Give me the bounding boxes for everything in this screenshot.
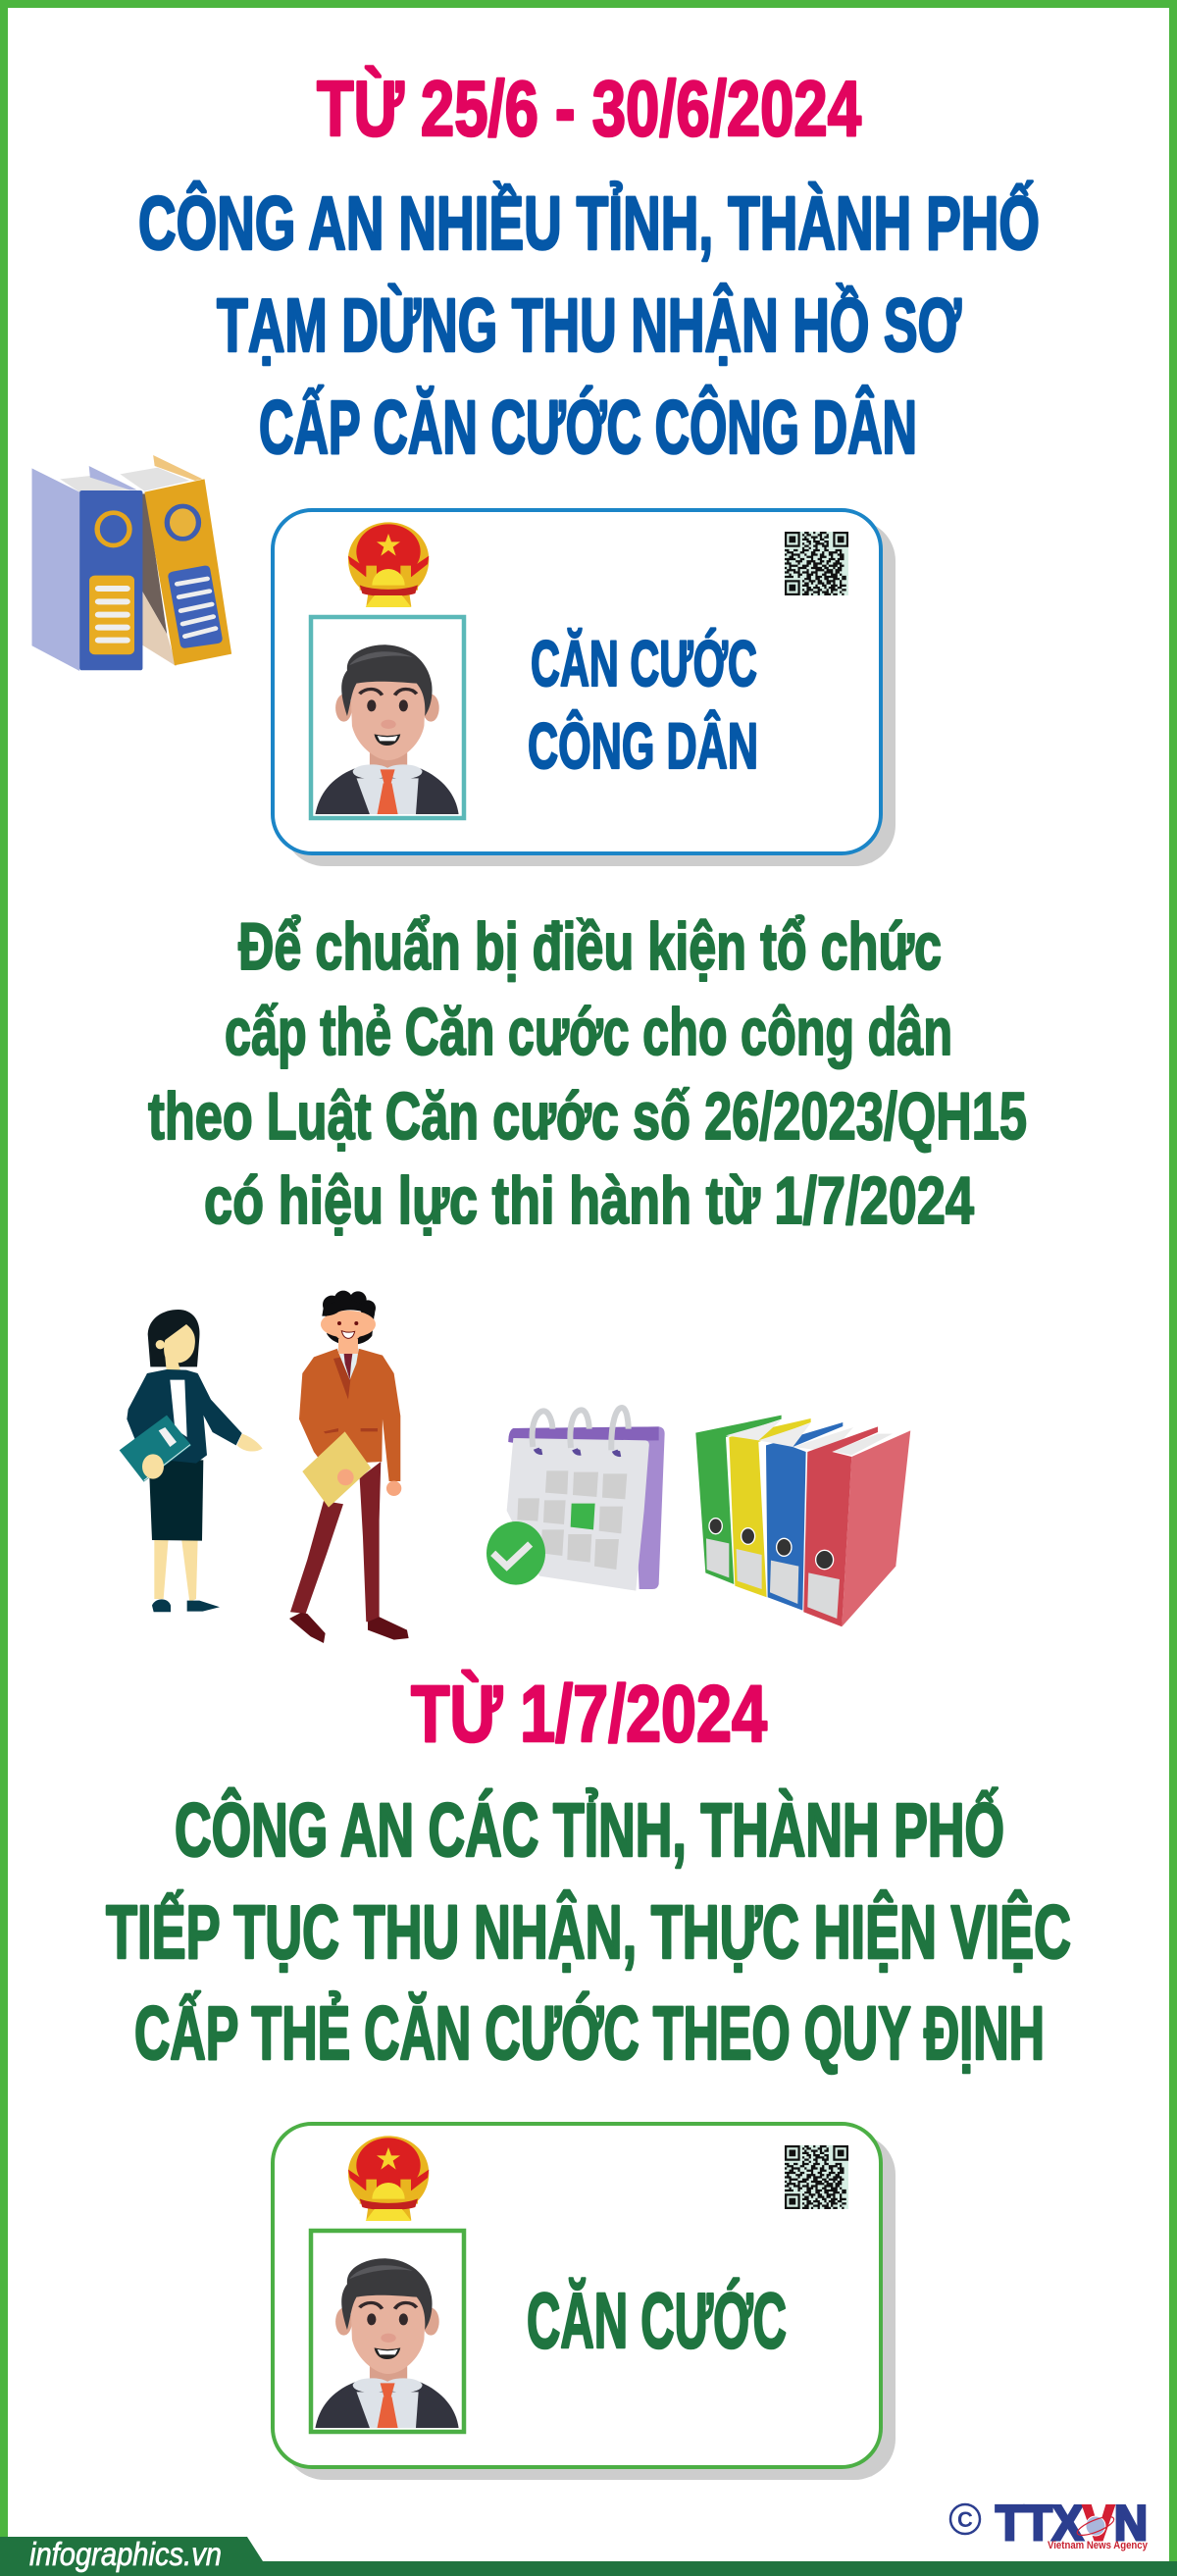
wordmark: TTXVN (996, 2496, 1148, 2550)
heading: suspension notice (138, 180, 1040, 470)
icon: portrait (315, 2258, 459, 2428)
icon: blue and yellow binders (32, 455, 231, 671)
card shadow (283, 520, 896, 866)
icon: two officers with folders (120, 1291, 409, 1643)
globe (1075, 2513, 1116, 2539)
icon: portrait (315, 644, 459, 814)
text block: purpose: Để chuẩn bị điều kiện tổ chức (238, 909, 942, 984)
card body (273, 510, 881, 853)
icon: QR code (785, 532, 848, 595)
icon: national emblem (348, 2136, 429, 2221)
woman (120, 1310, 263, 1612)
icon: QR code (785, 2145, 848, 2209)
man (289, 1291, 409, 1643)
panel: new ID card (273, 2124, 896, 2480)
text block: purpose (148, 909, 1027, 1238)
heading: effective date: TỪ 1/7/2024 (411, 1670, 767, 1759)
heading: resume notice (106, 1787, 1071, 2076)
card body (273, 2124, 881, 2467)
source site: infographics.vn (29, 2536, 222, 2572)
logo: TTXVN Vietnam News Agency (950, 2496, 1149, 2551)
footer bar (0, 2536, 1177, 2576)
copyright mark (950, 2504, 980, 2534)
icon: four coloured binders (695, 1416, 910, 1626)
card title: CĂN CƯỚC (531, 627, 757, 699)
card shadow (283, 2134, 896, 2480)
photo frame (311, 2231, 464, 2432)
icon: national emblem (348, 522, 429, 607)
card title: CÔNG DÂN (528, 709, 758, 782)
copyright mark: C (957, 2507, 973, 2532)
photo frame (311, 617, 464, 818)
icon: calendar with check mark (486, 1408, 665, 1591)
card title: CĂN CƯỚC (527, 2277, 787, 2364)
agency name: Vietnam News Agency (1048, 2540, 1149, 2551)
text block: purpose: có hiệu lực thi hành từ 1/7/2024 (204, 1163, 974, 1238)
panel: citizen ID card (273, 510, 896, 866)
title: date range: TỪ 25/6 - 30/6/2024 (317, 65, 861, 152)
card title (528, 627, 758, 782)
